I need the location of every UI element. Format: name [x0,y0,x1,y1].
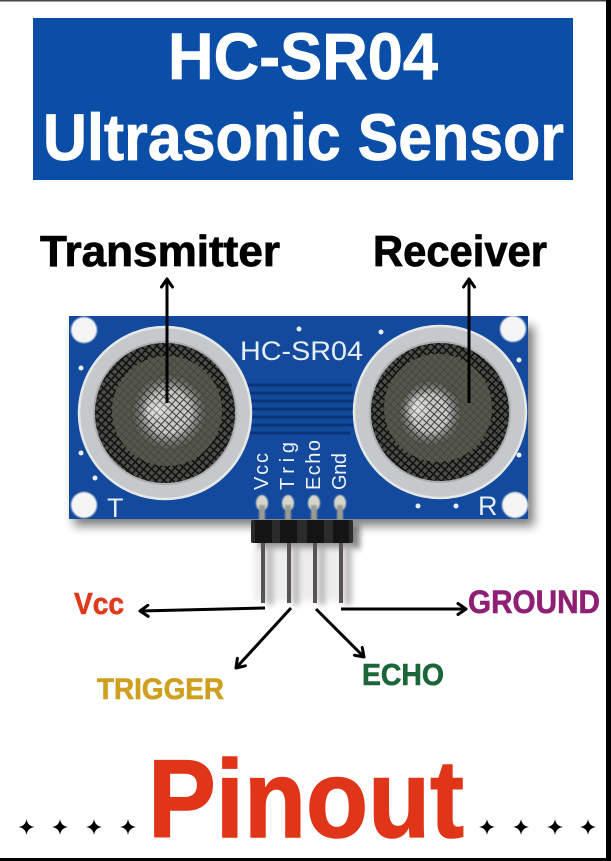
board silkscreen: HC-SR04: HC-SR04 [240,336,363,366]
title banner: HC-SR04 [168,19,438,93]
pin labels on board: Gnd [329,453,351,490]
metal pins [261,543,343,603]
label: TRIGGER: TRIGGER [97,673,224,706]
arrow: Transmitter [166,279,168,403]
pin header block [251,520,353,543]
receiver can [353,325,527,499]
board silkscreen: T: T [107,493,124,523]
decorative stars right [479,819,596,835]
mounting holes [71,316,528,518]
heading: Pinout: Pinout [148,738,464,861]
arrow: Receiver [468,279,470,403]
board shadow [74,326,534,526]
pin labels on board: Vcc [251,453,273,490]
pin labels on board: Echo [303,440,325,490]
label: GROUND: GROUND [468,584,600,620]
circuit board [69,316,528,519]
arrow: Trigger [236,608,291,668]
board silkscreen: R: R [478,491,498,521]
title banner: Ultrasonic Sensor [43,100,564,174]
decorative stars left [18,819,136,835]
board traces [246,385,354,433]
transmitter can [78,326,252,500]
pin labels on board [251,440,351,490]
label: Receiver: Receiver [373,227,547,276]
label: Transmitter: Transmitter [40,227,280,276]
arrow: Echo [316,609,364,657]
small vias [78,326,522,508]
pin labels on board: Trig [277,442,299,490]
title banner [33,18,573,180]
label: ECHO: ECHO [362,657,444,692]
solder pads [256,495,346,520]
label: Vcc: Vcc [74,586,124,621]
sensor module photo [69,316,534,605]
pin header shadow [254,525,360,605]
arrow: Vcc [140,608,265,611]
arrow: Ground [341,608,466,610]
